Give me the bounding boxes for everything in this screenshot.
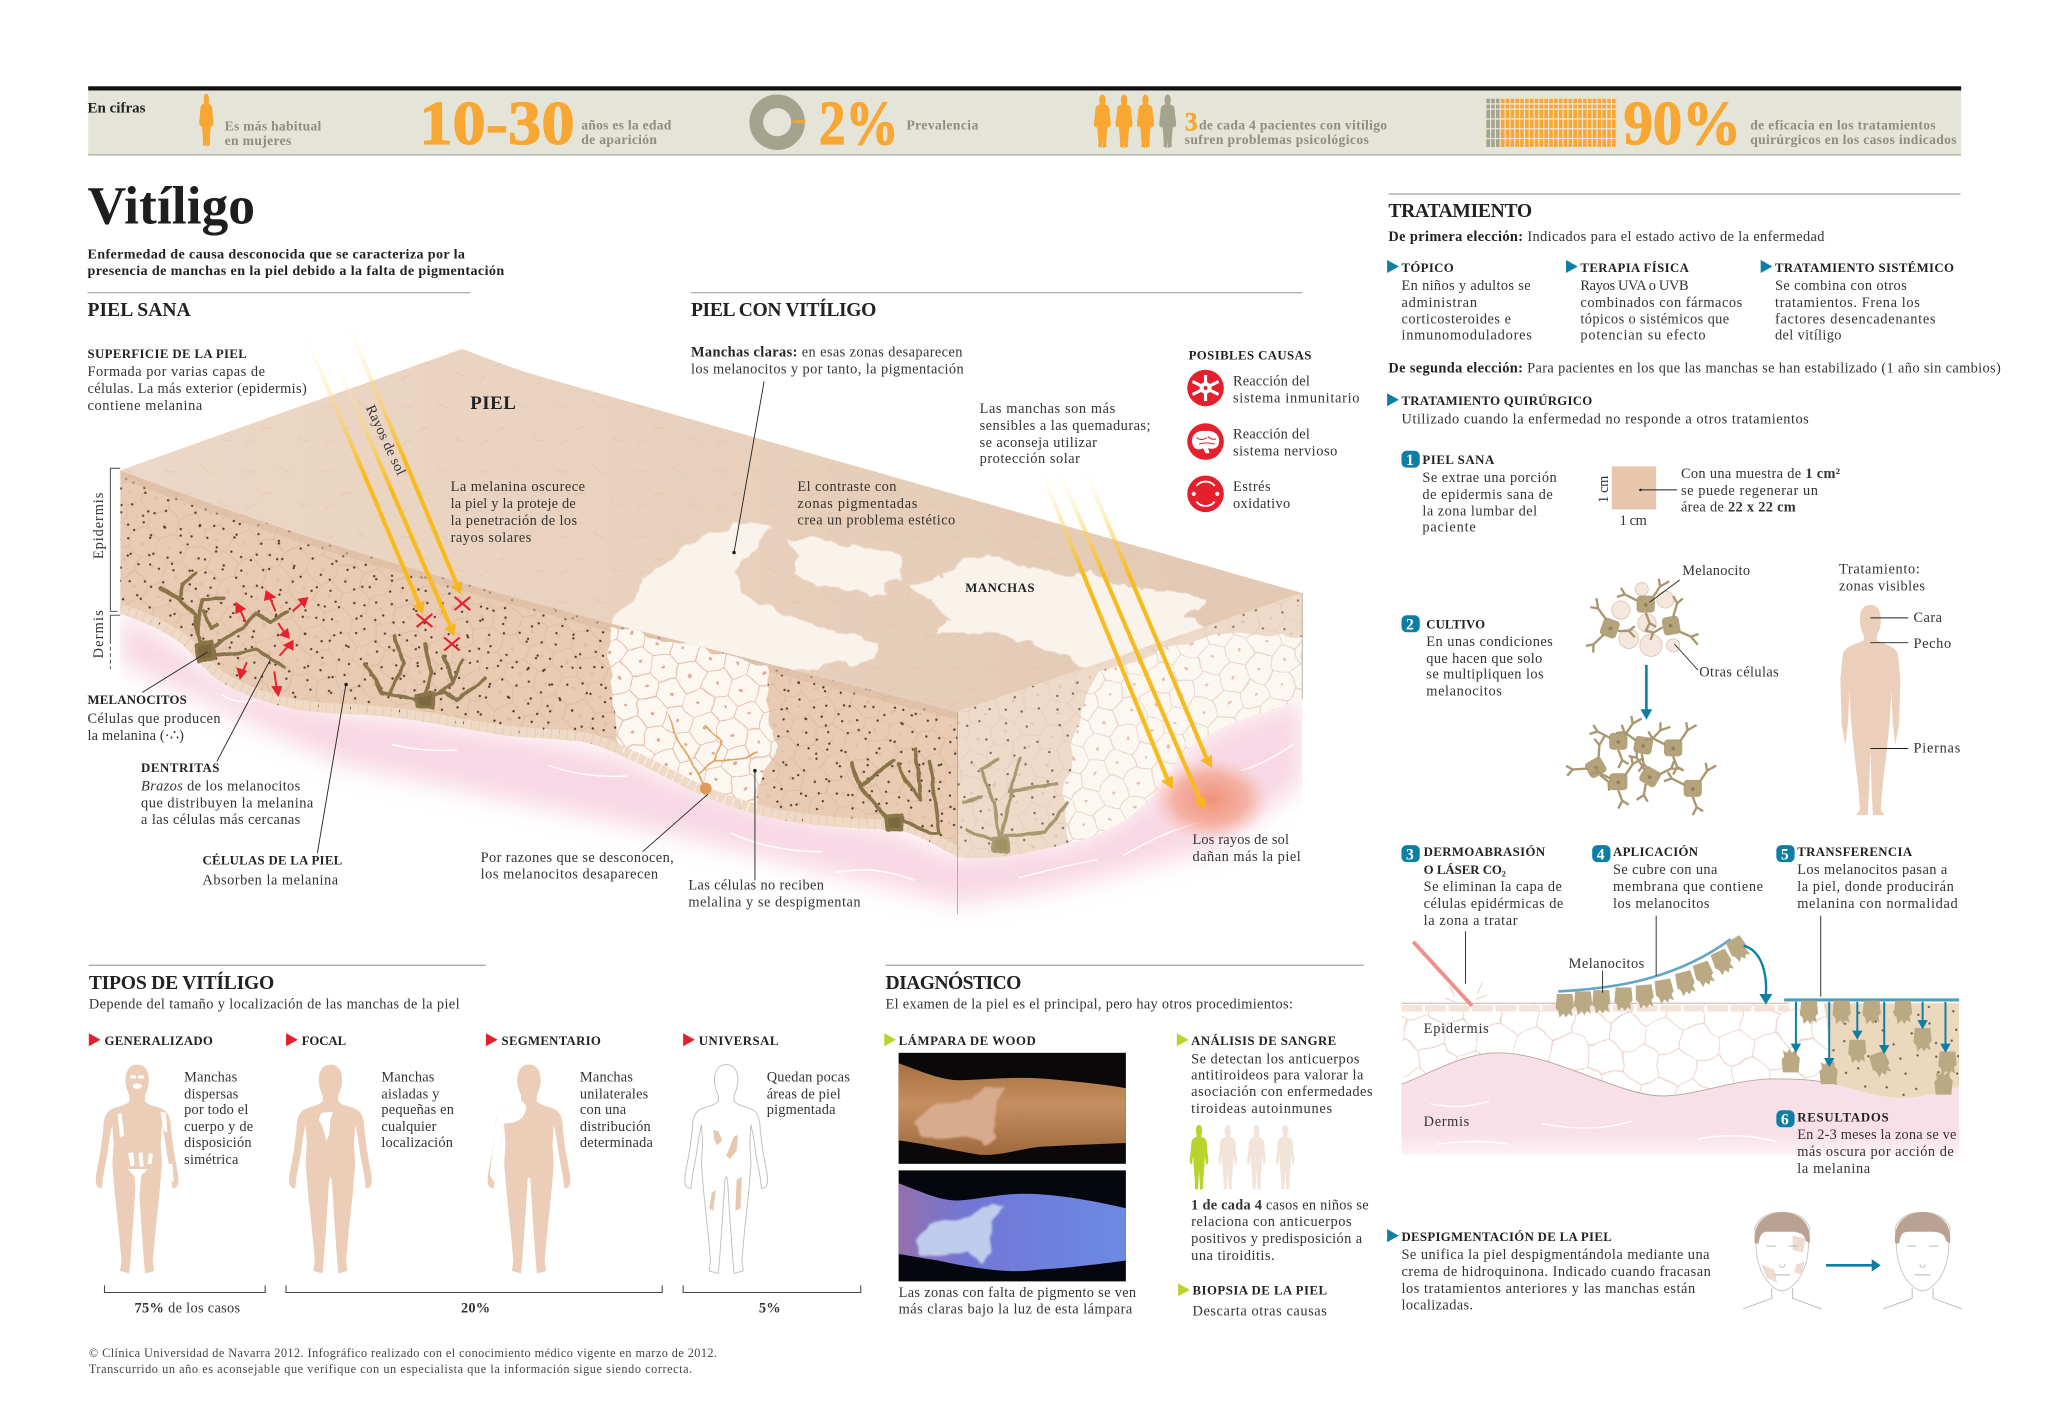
body silhouette treatment <box>1840 605 1961 815</box>
step 6 <box>1776 1110 1957 1177</box>
red crosses: rays blocked <box>417 597 470 651</box>
panel: tipos de vitiligo: TIPOS DE VITÍLIGO <box>89 972 274 994</box>
callout: superficie de la piel <box>88 347 307 414</box>
analisis de sangre: Se detectan los anticuerpos <box>1191 1051 1360 1067</box>
labels: melanocito, otras celulas: Melanocito <box>1682 563 1750 579</box>
text: sistema nervioso <box>1233 426 1337 459</box>
step 4: 4 <box>1597 847 1605 864</box>
step 1: piel sana: de epidermis sana de <box>1422 487 1553 503</box>
stat: surgical efficacy: quirúrgicos en los casos indicados <box>1750 132 1957 147</box>
labels: melanocito, otras celulas: Otras células <box>1699 665 1779 681</box>
callout: superficie de la piel: contiene melanina <box>88 398 203 414</box>
step 4 <box>1592 845 1763 912</box>
text: zonas visibles: Tratamiento: <box>1839 561 1920 577</box>
stat: women <box>225 119 322 148</box>
footer credit: © Clínica Universidad de Navarra 2012. Infográfico realizado con el conocimiento médico vigente en marzo de 2012. <box>89 1346 717 1360</box>
panel: tipos de vitiligo <box>89 972 861 1317</box>
label: piel: PIEL <box>470 393 516 414</box>
footer credit <box>89 1346 717 1376</box>
melanocyte 1 with dendrites <box>161 573 287 666</box>
text: universal: Quedan pocas <box>767 1070 850 1086</box>
callout: superficie de la piel: células. La más exterior (epidermis) <box>88 381 307 397</box>
step 4: Se cubre con una <box>1613 862 1718 878</box>
step 5 <box>1776 845 1958 912</box>
body: universal <box>685 1065 768 1274</box>
treatment: terapia fisica: tópicos o sistémicos que <box>1580 311 1729 327</box>
percent labels: 5% <box>759 1301 781 1317</box>
text: universal: áreas de piel <box>767 1087 841 1103</box>
despigmentacion <box>1387 1229 1711 1313</box>
skin surface top <box>120 349 1302 712</box>
analisis de sangre <box>1177 1033 1373 1117</box>
cell culture melanocytes <box>1558 715 1716 815</box>
treatment: sistemico: TRATAMIENTO SISTÉMICO <box>1775 261 1954 275</box>
surgery skin cross-section <box>1401 916 1959 1155</box>
text: focal: cualquier <box>381 1119 437 1135</box>
text: focal: localización <box>381 1135 453 1151</box>
callout: celulas no reciben <box>688 878 861 911</box>
text: sistema nervioso: Reacción del <box>1233 426 1310 442</box>
despigmentacion: los tratamientos anteriores y las manchas están <box>1401 1281 1695 1297</box>
sun rays vitiligo skin <box>1040 468 1207 801</box>
treatment: sistemico <box>1761 260 1954 344</box>
label: melanocitos: Melanocitos <box>1569 956 1645 972</box>
text: muestra: Con una muestra de 1 cm² <box>1681 466 1840 482</box>
en cifras label: En cifras <box>88 100 146 116</box>
sample square diagram <box>1596 466 1677 529</box>
text: 1 de cada 4: 1 de cada 4 casos en niños se <box>1191 1198 1369 1214</box>
analisis de sangre: antitiroideos para valorar la <box>1191 1068 1364 1084</box>
treatment: topico: TÓPICO <box>1401 261 1454 275</box>
treatment: topico: inmunomoduladores <box>1401 328 1532 344</box>
title: Vitíligo <box>88 175 255 235</box>
text: sistema inmunitario: Reacción del <box>1233 373 1310 389</box>
despigmentacion: DESPIGMENTACIÓN DE LA PIEL <box>1401 1230 1612 1244</box>
stat: age range <box>419 88 672 158</box>
melanocyte 2 with dendrites <box>366 636 485 708</box>
panel: diagnostico <box>884 972 1373 1319</box>
callout: melanina: rayos solares <box>451 530 532 546</box>
caption: lampara <box>899 1285 1136 1317</box>
treatment: topico: administran <box>1401 295 1477 311</box>
stats band: en cifras <box>88 86 1961 158</box>
tratamiento quirurgico heading: Utilizado cuando la enfermedad no responde a otros tratamientos <box>1401 411 1809 427</box>
step 2: cultivo: se multipliquen los <box>1426 667 1544 683</box>
callout: rayos de sol: dañan más la piel <box>1192 849 1301 865</box>
callout: manchas claras: los melanocitos y por tanto, la pigmentación <box>691 362 964 378</box>
stat: psychological problems <box>1185 108 1387 147</box>
repigmented zone <box>1823 1003 1959 1104</box>
stat: psychological problems: sufren problemas psicológicos <box>1185 132 1369 147</box>
step 3: células epidérmicas de <box>1424 896 1563 912</box>
label: rayos de sol: Rayos de sol <box>362 403 409 478</box>
body silhouette treatment: Pecho <box>1913 636 1951 652</box>
callout: manchas claras: Manchas claras: en esas zonas desaparecen <box>691 345 963 361</box>
body silhouette treatment: Cara <box>1913 610 1943 626</box>
step 6: 6 <box>1781 1112 1789 1129</box>
callout: dentritas <box>141 761 314 828</box>
tratamiento quirurgico heading <box>1387 393 1809 427</box>
stat: prevalence: 2% <box>819 88 899 158</box>
step 5: TRANSFERENCIA <box>1797 845 1913 859</box>
photo: arm wood lamp <box>899 1170 1126 1281</box>
text: sistema inmunitario <box>1233 373 1360 406</box>
callout: celulas de la piel <box>202 854 342 888</box>
text: generalizado <box>184 1070 253 1168</box>
stat: psychological problems: 3 <box>1185 108 1198 137</box>
step 2: cultivo <box>1401 615 1553 700</box>
treatment: terapia fisica: potencian su efecto <box>1580 328 1706 344</box>
surgery skin cross-section: Dermis <box>1424 1114 1470 1130</box>
text: generalizado: disposición <box>184 1135 252 1151</box>
callout: melanina: La melanina oscurece <box>451 479 585 495</box>
type headings <box>89 1033 778 1048</box>
icon: four people <box>1095 96 1175 146</box>
icon: oxidative stress <box>1187 476 1224 512</box>
stat: women: en mujeres <box>225 133 291 148</box>
body: focal <box>289 1065 372 1274</box>
callout: quemaduras: se aconseja utilizar <box>980 435 1097 451</box>
text: 1 de cada 4: relaciona con anticuerpos <box>1191 1214 1352 1230</box>
tipos intro: Depende del tamaño y localización de las manchas de la piel <box>89 996 460 1012</box>
analisis de sangre: tiroideas autoinmunes <box>1191 1101 1332 1117</box>
step 5: la piel, donde producirán <box>1797 879 1954 895</box>
heading: lampara de wood: LÁMPARA DE WOOD <box>899 1034 1036 1048</box>
type headings: FOCAL <box>302 1034 346 1048</box>
faded melanocyte orange dendrites <box>669 715 758 795</box>
ray arrowheads <box>413 581 462 636</box>
stat: age range: de aparición <box>581 132 657 147</box>
tratamiento quirurgico heading: TRATAMIENTO QUIRÚRGICO <box>1401 394 1592 408</box>
icon: immune cell <box>1187 370 1224 406</box>
callout: dentritas: que distribuyen la melanina <box>141 795 314 811</box>
sample square diagram: 1 cm <box>1620 513 1647 529</box>
epidermis stratum <box>1401 1006 1789 1011</box>
step 5: 5 <box>1781 847 1789 864</box>
step 2: cultivo: que hacen que solo <box>1426 651 1543 667</box>
text: muestra: se puede regenerar un <box>1681 483 1818 499</box>
text: segmentario: distribución <box>580 1119 651 1135</box>
stat: surgical efficacy: 90% <box>1624 88 1741 158</box>
callout: melanocitos: MELANOCITOS <box>88 693 187 707</box>
panel: tratamiento: TRATAMIENTO <box>1388 201 1532 222</box>
text: generalizado: dispersas <box>184 1087 239 1103</box>
treatment: topico <box>1387 260 1532 344</box>
step 3: 3 <box>1406 847 1414 864</box>
arrow: culture <box>1640 665 1652 720</box>
heading: piel sana: PIEL SANA <box>88 300 191 321</box>
type headings: SEGMENTARIO <box>502 1034 601 1048</box>
subtitle <box>88 247 504 279</box>
basal cell row <box>120 614 957 857</box>
melanocytes transferred <box>1782 1001 1957 1095</box>
treatment: sistemico: del vitíligo <box>1775 328 1842 344</box>
callout: dentritas: a las células más cercanas <box>141 812 301 828</box>
analisis de sangre: asociación con enfermedades <box>1191 1084 1373 1100</box>
step 1: piel sana: Se extrae una porción <box>1422 470 1557 486</box>
face before <box>1743 1212 1821 1309</box>
text: 1 de cada 4 <box>1191 1198 1369 1264</box>
callout: rayos de sol <box>1192 832 1301 865</box>
callout: melanina: la penetración de los <box>451 513 578 529</box>
step 2: cultivo: melanocitos <box>1426 684 1502 700</box>
text: estres oxidativo: oxidativo <box>1233 496 1290 512</box>
callout: razones: los melanocitos desaparecen <box>481 866 658 882</box>
treatment: terapia fisica: Rayos UVA o UVB <box>1580 278 1689 294</box>
stat: surgical efficacy <box>1624 88 1957 158</box>
sun rays healthy skin <box>306 320 457 627</box>
label: melanocitos <box>1569 916 1656 993</box>
depigmented zone <box>609 624 778 831</box>
label: manchas: MANCHAS <box>965 581 1034 595</box>
white patch: large <box>612 522 879 671</box>
melanocyte 3 with dendrites <box>852 748 939 833</box>
subtitle: presencia de manchas en la piel debido a la falta de pigmentación <box>88 263 504 279</box>
heading: piel con vitiligo: PIEL CON VITÍLIGO <box>691 299 876 321</box>
step 4: los melanocitos <box>1613 896 1710 912</box>
block vertical edge <box>957 593 1302 914</box>
icon: brain <box>1187 423 1224 460</box>
label: dermis: Dermis <box>91 610 107 658</box>
step 5: Los melanocitos pasan a <box>1797 862 1948 878</box>
text: focal: pequeñas en <box>381 1102 454 1118</box>
callout: melanocitos <box>88 693 221 744</box>
transfer membrane <box>1784 916 1959 1000</box>
text: focal: aisladas y <box>381 1087 440 1103</box>
callout: contraste: zonas pigmentadas <box>797 496 918 512</box>
text: segmentario: Manchas <box>580 1070 633 1086</box>
callout: melanina: la piel y la proteje de <box>451 496 576 512</box>
photo: arm visible light <box>899 1053 1126 1164</box>
footer credit: Transcurrido un año es aconsejable que verifique con un especialista que la información sigue siendo correcta. <box>89 1362 692 1376</box>
biopsia <box>1178 1283 1327 1319</box>
panel: posibles causas: POSIBLES CAUSAS <box>1189 348 1311 362</box>
text: zonas visibles <box>1839 561 1925 594</box>
text: universal <box>767 1070 850 1118</box>
step 3: DERMOABRASIÓN <box>1424 845 1546 859</box>
panel: posibles causas <box>1187 348 1360 512</box>
step 1: piel sana: 1 <box>1406 452 1414 469</box>
step 1: piel sana: PIEL SANA <box>1422 453 1495 467</box>
callout: razones <box>481 850 674 882</box>
despigmentacion: Se unifica la piel despigmentándola mediante una <box>1401 1247 1710 1263</box>
callout: dentritas: Brazos de los melanocitos <box>141 778 301 794</box>
biopsia: Descarta otras causas <box>1192 1303 1327 1319</box>
callout: superficie de la piel: Formada por varias capas de <box>88 364 265 380</box>
text: focal: Manchas <box>381 1070 435 1086</box>
epidermis front face <box>120 457 957 875</box>
callout: razones: Por razones que se desconocen, <box>481 850 674 866</box>
treatment: sistemico: Se combina con otros <box>1775 278 1907 294</box>
stat: prevalence <box>819 88 978 158</box>
step 4: membrana que contiene <box>1613 879 1763 895</box>
leader lines <box>142 381 764 880</box>
brackets of percent <box>104 1285 861 1292</box>
text: generalizado: cuerpo y de <box>184 1119 253 1135</box>
callout: melanocitos: la melanina (·∴) <box>88 728 184 744</box>
labels: layers: Epidermis <box>1424 1021 1489 1037</box>
callout: contraste: El contraste con <box>797 479 897 495</box>
text: segmentario: determinada <box>580 1135 653 1151</box>
callout: celulas de la piel: Absorben la melanina <box>202 872 339 888</box>
text: 1 de cada 4: una tiroiditis. <box>1191 1248 1275 1264</box>
laser <box>1413 931 1486 1006</box>
text: segmentario <box>580 1070 653 1151</box>
white patches on surface <box>612 522 1206 671</box>
step 3: 2 <box>1502 869 1506 878</box>
step 3 <box>1401 845 1563 929</box>
diagnostico intro: El examen de la piel es el principal, pero hay otros procedimientos: <box>886 996 1293 1012</box>
callout: quemaduras: sensibles a las quemaduras; <box>980 418 1151 434</box>
stat: age range: años es la edad <box>581 117 672 132</box>
caption: lampara: más claras bajo la luz de esta lámpara <box>899 1301 1133 1317</box>
callout: quemaduras <box>980 401 1151 467</box>
type headings: GENERALIZADO <box>104 1034 213 1048</box>
callout: celulas no reciben: Las células no reciben <box>688 878 824 894</box>
callout: quemaduras: Las manchas son más <box>980 401 1116 417</box>
dermis layer <box>120 614 1302 904</box>
text: estres oxidativo <box>1233 479 1290 512</box>
treatment: terapia fisica: combinados con fármacos <box>1580 295 1743 311</box>
icon: prevalence donut <box>756 101 805 143</box>
segunda eleccion: De segunda elección: Para pacientes en los que las manchas se han estabilizado (1 año sin cambios) <box>1388 360 2001 376</box>
treatment: topico: corticosteroides e <box>1401 311 1511 327</box>
labels: melanocito, otras celulas <box>1650 563 1779 681</box>
despigmentacion: localizadas. <box>1401 1297 1473 1313</box>
treatment: topico: En niños y adultos se <box>1401 278 1531 294</box>
melanocyte 4 faded <box>964 759 1067 852</box>
text: focal <box>381 1070 454 1151</box>
biopsia: BIOPSIA DE LA PIEL <box>1192 1283 1327 1297</box>
dermis fibres <box>1430 1101 1776 1144</box>
text: zonas visibles: zonas visibles <box>1839 578 1925 594</box>
callout: contraste: crea un problema estético <box>797 512 955 528</box>
percent labels: 75% de los casos <box>135 1301 241 1317</box>
text: segmentario: unilaterales <box>580 1087 649 1103</box>
text: universal: pigmentada <box>767 1102 836 1118</box>
treatment: terapia fisica: TERAPIA FÍSICA <box>1580 261 1690 275</box>
treatment: sistemico: tratamientos. Frena los <box>1775 295 1920 311</box>
step 2: cultivo: 2 <box>1406 617 1414 634</box>
face after <box>1883 1212 1962 1309</box>
body: segmentario <box>488 1065 570 1274</box>
skin block illustration <box>110 320 1302 914</box>
step 3: la zona a tratar <box>1424 913 1518 929</box>
stat: women: Es más habitual <box>225 119 322 134</box>
epidermis bracket <box>110 468 120 640</box>
label: epidermis: Epidermis <box>91 492 107 559</box>
callout: rayos de sol: Los rayos de sol <box>1192 832 1289 848</box>
step 4: APLICACIÓN <box>1613 845 1699 859</box>
text: 1 de cada 4: positivos y predisposición a <box>1191 1231 1363 1247</box>
step 6: En 2-3 meses la zona se ve <box>1797 1127 1957 1143</box>
step 3: O LÁSER CO <box>1424 863 1502 877</box>
white patch: middle <box>784 536 905 594</box>
epidermis right face <box>957 588 1302 862</box>
callout: melanina <box>451 479 585 546</box>
subtitle: Enfermedad de causa desconocida que se caracteriza por la <box>88 247 465 263</box>
primera eleccion: De primera elección: Indicados para el estado activo de la enfermedad <box>1388 229 1825 245</box>
sample square diagram: 1 cm <box>1596 476 1612 503</box>
despigmentacion: crema de hidroquinona. Indicado cuando fracasan <box>1401 1264 1711 1280</box>
percent labels: 20% <box>461 1301 490 1317</box>
text: estres oxidativo: Estrés <box>1233 479 1271 495</box>
stat: psychological problems: de cada 4 pacientes con vitíligo <box>1199 117 1387 132</box>
burn on skin <box>1151 758 1271 841</box>
text: generalizado: por todo el <box>184 1102 249 1118</box>
caption: lampara: Las zonas con falta de pigmento se ven <box>899 1285 1136 1301</box>
analisis de sangre: ANÁLISIS DE SANGRE <box>1191 1034 1336 1048</box>
text: generalizado: Manchas <box>184 1070 238 1086</box>
type headings: UNIVERSAL <box>699 1034 778 1048</box>
callout: celulas no reciben: melalina y se despigmentan <box>688 895 861 911</box>
vitiligo ray arrowheads <box>1161 755 1212 810</box>
epidermis section <box>1401 1003 1959 1108</box>
callout: contraste <box>797 479 955 528</box>
callout: celulas de la piel: CÉLULAS DE LA PIEL <box>202 854 342 868</box>
percent labels <box>135 1301 781 1317</box>
membrane with melanocytes <box>1556 935 1752 1018</box>
step 1: piel sana: la zona lumbar del <box>1422 503 1537 519</box>
step 6: más oscura por acción de <box>1797 1144 1954 1160</box>
step 6: RESULTADOS <box>1797 1110 1889 1124</box>
step 2: cultivo: CULTIVO <box>1426 617 1485 631</box>
step 3: Se eliminan la capa de <box>1424 879 1562 895</box>
callout: melanocitos: Células que producen <box>88 711 221 727</box>
cell culture mixed <box>1576 579 1700 664</box>
stat: surgical efficacy: de eficacia en los tratamientos <box>1750 117 1936 132</box>
callout: manchas claras <box>691 345 964 378</box>
body silhouette treatment: Piernas <box>1913 740 1961 756</box>
panel: tratamiento <box>1387 201 2001 1313</box>
body: generalizado <box>96 1065 178 1274</box>
red arrows melanin spread <box>236 592 307 695</box>
callout: quemaduras: protección solar <box>980 451 1080 467</box>
callout: dentritas: DENTRITAS <box>141 761 219 775</box>
step 1: piel sana: paciente <box>1422 520 1476 536</box>
text: sistema nervioso: sistema nervioso <box>1233 443 1337 459</box>
step 1: piel sana <box>1401 451 1557 536</box>
white patch: right <box>905 556 1216 670</box>
text: muestra <box>1681 466 1840 515</box>
stat: age range: 10-30 <box>419 88 575 158</box>
text: segmentario: con una <box>580 1102 627 1118</box>
text: muestra: área de 22 x 22 cm <box>1681 499 1796 515</box>
arrow: apply membrane <box>1744 946 1772 1004</box>
treatment: sistemico: factores desencadenantes <box>1775 311 1936 327</box>
callout: superficie de la piel: SUPERFICIE DE LA PIEL <box>88 347 247 361</box>
step 2: cultivo: En unas condiciones <box>1426 634 1553 650</box>
step 5: melanina con normalidad <box>1797 896 1958 912</box>
step 6: la melanina <box>1797 1161 1871 1177</box>
stat: prevalence: Prevalencia <box>906 117 978 132</box>
arrow: before to after <box>1826 1259 1881 1272</box>
panel: diagnostico: DIAGNÓSTICO <box>886 972 1021 994</box>
icon: woman silhouette <box>200 95 213 145</box>
text: generalizado: simétrica <box>184 1152 239 1168</box>
treatment: terapia fisica <box>1566 260 1743 344</box>
icon: four children <box>1190 1126 1294 1189</box>
arrows: transfer <box>1791 1002 1951 1067</box>
text: sistema inmunitario: sistema inmunitario <box>1233 390 1360 406</box>
icon: 90 percent grid <box>1485 104 1618 139</box>
